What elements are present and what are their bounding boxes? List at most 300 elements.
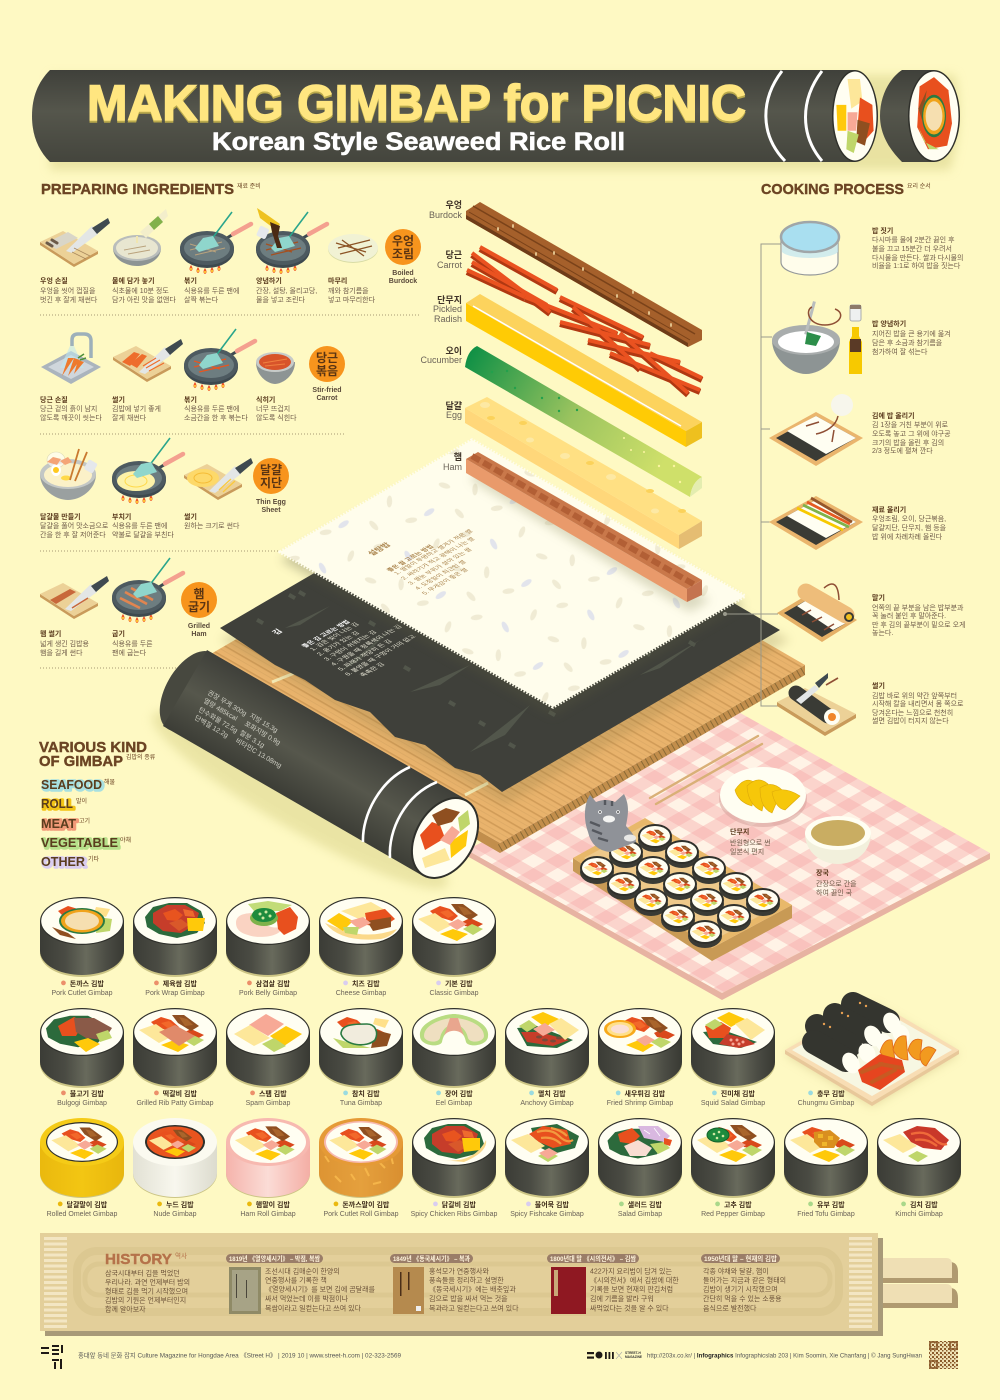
red pepper gimbap: Red Pepper Gimbap [701,1211,765,1218]
salad gimbap: ● 샐러드 김밥 [618,1198,662,1210]
history heading and intro: 함께 알아보자 [105,1304,146,1314]
chungmu gimbap plate: Chungmu Gimbap [798,1100,855,1107]
legend: gimbap categories: 야채 [120,836,131,844]
timeline: late 1950s: 들어가는 지금과 같은 형태의 [703,1276,786,1284]
gimbap row 1 [40,897,496,997]
step text: 달걀을 풀어 맛소금으로 [40,521,109,530]
bento box of gimbap [573,818,792,961]
bulgogi gimbap [40,1008,124,1107]
classic gimbap: ● 기본 김밥 [435,977,473,989]
step text: 않도록 식힌다 [256,413,297,422]
nutrition text: 열량 485kcal [202,697,239,723]
rice text: 좋은 쌀 고르는 방법 [385,543,436,573]
legend: gimbap categories: ROLL [41,796,73,811]
step 5: rolling [777,584,965,642]
step 1: rice pot: 불을 끄고 15분간 더 우려서 [872,244,952,253]
step 3: rice on seaweed: 김에 밥 올리기 [872,411,915,420]
timeline: late 1950s [701,1254,786,1312]
fried shrimp gimbap [598,1008,682,1107]
bowl label [816,868,857,897]
title text: MAKING GIMBAP for PICNIC [87,75,746,131]
icon: soaking bowl with vinegar [113,209,168,266]
step 5: rolling: 놓는다. [872,628,893,637]
strip labels: 오이 [445,346,462,356]
plate label [730,827,771,856]
tuna gimbap [319,1008,403,1107]
nutrition text: 권장 무게 300g [206,688,249,718]
history heading and intro: HISTORY [105,1251,172,1268]
plate of pickled radish [719,767,807,856]
step text: 식초물에 10분 정도 [112,286,169,295]
rolled omelet gimbap: Rolled Omelet Gimbap [47,1211,118,1218]
step text: 간을 한 후 잘 저어준다 [40,530,106,539]
step 2: seasoning rice: 첨가하여 잘 섞는다 [872,347,928,356]
plate label: 반원형으로 썬 [730,838,771,847]
gimbap row 2 [40,1000,959,1107]
step text: 우엉 손질 [40,276,68,285]
strip labels: Burdock [429,210,462,220]
step text: 식용유를 두른 팬에 [184,286,239,295]
heading: cooking process: COOKING PROCESS [761,181,904,198]
spicy fishcake gimbap: ● 불어묵 김밥 [525,1198,569,1210]
step text: 벗긴 후 잘게 채썬다 [40,295,98,304]
bowl label: 하여 끓인 국 [816,888,853,897]
strip labels: 당근 [445,249,462,260]
ingredient strips [420,199,710,612]
timeline: late 1950s: 각종 야채와 달걀, 햄이 [703,1266,769,1276]
history heading and intro: 형태로 김을 먹기 시작했으며 [105,1286,188,1296]
anchovy gimbap: Anchovy Gimbap [520,1100,574,1107]
timeline: 1849: 김으로 밥을 싸서 먹는 것을 [429,1294,508,1303]
history heading and intro: 김밥의 기원은 언제부터인지 [105,1296,186,1304]
step text: 간장, 설탕, 올리고당, [256,286,317,295]
circle: stir-fried carrot [309,346,345,402]
grilled rib patty gimbap: ● 떡갈비 김밥 [153,1087,197,1099]
step text: 물을 넣고 조린다 [256,295,306,304]
step 5: rolling: 말기 [872,593,885,602]
classic gimbap: Classic Gimbap [429,990,479,997]
legend: gimbap categories: MEAT [42,817,78,832]
icon: pan stir-frying burdock [180,212,251,274]
seaweed sheet: 6. 붙였을 때 구멍이 거의 없고 [342,633,418,677]
chungmu gimbap plate: ● 충무 김밥 [807,1087,845,1099]
panel: cooking process steps [769,222,965,736]
big gimbap roll [138,641,493,911]
step 5: rolling: 언쪽의 끝 부분을 남은 밥부분과 [872,603,964,612]
step 5: rolling: 꼭 눌러 붙인 후 말아준다. [872,611,946,620]
strip labels [420,199,463,472]
timeline: late 1800s: 기록을 보면 현재의 판김처럼 [590,1284,673,1294]
footer right: credits and QR code: http://203x.co.kr/ | Infographics Infographicslab 203 | Kim Soomin, Xie Chanfang | © Jang SungHwan [647,1352,922,1360]
pork wrap gimbap: Pork Wrap Gimbap [145,990,205,997]
legend: gimbap categories: OTHER [42,855,87,870]
step 3: rice on seaweed: 크기의 밥을 올린 후 김의 [872,438,944,447]
icon: cooled carrots bowl [256,352,295,384]
circle: boiled burdock: Boiled [392,270,414,277]
spicy chicken ribs gimbap: ● 닭갈비 김밥 [432,1198,476,1210]
timeline: late 1950s: 음식으로 발전했다 [703,1304,757,1312]
seaweed text: 김 [269,627,284,636]
strip labels: 우엉 [445,199,462,210]
legend: gimbap categories: 해물 [104,778,116,786]
step text: 부치기 [112,512,131,521]
nutrition text: 단백질 12.2g [193,713,230,740]
circle: grilled ham [181,582,217,638]
step text: 물에 담가 놓기 [112,276,155,285]
eel gimbap: ● 장어 김밥 [435,1087,473,1099]
step text: 넣고 마무리한다 [328,295,376,304]
step 2: seasoning rice: 지어진 밥을 큰 용기에 옮겨 [872,329,951,338]
pork cutlet gimbap: Pork Cutlet Gimbap [51,990,113,997]
spam gimbap: ● 스팸 김밥 [249,1087,287,1099]
picnic cloth [467,710,990,1000]
footer right: credits and QR code: MAGAZINE [625,1355,642,1359]
strip labels: Pickled [433,304,462,314]
salad gimbap [598,1118,682,1218]
timeline: 1819: 싸서 먹었는데 이를 박점이나 [265,1294,349,1303]
step text: 소금간을 한 후 볶는다 [184,413,248,422]
nude gimbap: ● 누드 김밥 [156,1198,194,1210]
cheese gimbap: ● 치즈 김밥 [342,977,380,989]
step text: 우엉을 씻어 껍질을 [40,286,96,295]
step text: 식용유를 두른 팬에 [112,521,167,530]
timeline: 1819: 조선시대 김매순이 한양의 [265,1266,340,1276]
seaweed sheet: 5. 파래가 적당히 든 김 [335,638,394,672]
circle: grilled ham: 햄 [193,586,205,601]
strip: cucumber [465,346,702,497]
legend: gimbap categories: MEAT [41,816,76,831]
timeline: late 1950s: 1950년대 말 – 현재의 김밥 [704,1254,777,1263]
nutrition text: 탄수화물 72.5g [197,705,240,735]
step text: 김밥에 넣기 좋게 [112,404,161,413]
step 6: slicing roll [777,673,964,736]
history heading and intro [105,1251,190,1314]
squid salad gimbap: Squid Salad Gimbap [701,1100,765,1107]
timeline: 1849: 《동국세시기》에는 배춧잎과 [429,1284,516,1294]
circle: boiled burdock: 우엉 [392,234,414,248]
strip labels: 햄 [454,451,462,462]
step 4: adding fillings: 우엉조림, 오이, 당근볶음, [872,514,946,523]
step text: 약불로 달걀을 부친다 [112,530,174,539]
legend: gimbap categories: 고기 [79,817,90,825]
pork cutlet roll gimbap: Pork Cutlet Roll Gimbap [323,1211,399,1218]
pork cutlet gimbap [40,897,124,997]
circle: boiled burdock [385,229,421,285]
bowl of soup [805,816,871,897]
legend: gimbap categories: VEGETABLE [41,835,118,850]
step text: 않도록 깨끗이 씻는다 [40,413,102,422]
icon: grilling ham [112,558,183,623]
circle: boiled burdock: 조림 [392,247,414,261]
step 6: slicing roll: 썰기 [872,681,885,690]
legend: gimbap categories: SEAFOOD [41,777,102,792]
timeline: late 1950s: 김밥이 생기기 시작했으며 [703,1284,778,1294]
timeline: late 1800s: 422가지 요리법이 담겨 있는 [590,1266,672,1276]
step 3: rice on seaweed: 김 1장을 거친 부분이 위로 [872,420,949,429]
timeline: 1849 [390,1254,519,1314]
tuna gimbap: ● 참치 김밥 [342,1087,380,1099]
timeline: late 1800s: 1800년대 말 《시의전서》 – 김쌈 [550,1254,636,1263]
strip: ham [466,452,710,612]
fried shrimp gimbap: Fried Shrimp Gimbap [607,1100,673,1107]
grilled rib patty gimbap: Grilled Rib Patty Gimbap [136,1100,214,1107]
step text: 햄 썰기 [40,629,61,638]
step 4: adding fillings [769,496,947,550]
anchovy gimbap [505,1008,589,1107]
ham roll gimbap [226,1118,310,1218]
step 4: adding fillings: 밥 위에 차례차례 올린다 [872,532,943,541]
footer right: credits and QR code: STREET-H [625,1351,641,1355]
rice text: 3. 쌀눈 부위가 살아 있는 쌀 [406,547,474,586]
strip: carrot sticks [467,247,702,395]
step text: 원하는 크기로 썬다 [184,521,240,530]
step 2: seasoning rice: 밥 양념하기 [872,319,906,328]
panel: history chopstick sleeve [40,1233,958,1336]
icon: burdock on board [40,218,110,267]
squid salad gimbap [691,1008,775,1107]
classic gimbap [412,897,496,997]
rice text: 1. 쌀알이 투명하고 쌀겨가 적은 쌀 [392,528,475,576]
step text: 굽기 [112,629,125,638]
rice text: 설탕밥 [365,541,393,557]
step 3: rice on seaweed: 2/3 정도에 펼쳐 깐다 [872,446,933,455]
pork wrap gimbap: ● 제육쌈 김밥 [153,977,197,989]
spicy fishcake gimbap: Spicy Fishcake Gimbap [510,1211,584,1218]
rice text [365,528,477,596]
circle: stir-fried carrot: Stir-fried [312,387,342,394]
nutrition text: 지방 15.3g [248,711,280,735]
icon: chopsticks [878,1258,958,1308]
heading: various kind of gimbap: 김밥의 종류 [126,753,156,761]
legend: gimbap categories: VEGETABLE [42,836,120,851]
seaweed sheet: 1. 검은 빛이 나는 김 [307,621,361,652]
kimchi gimbap [877,1118,961,1218]
footer left: logo and credit: 홍대앞 동네 문화 잡지 Culture Magazine for Hongdae Area 《Street H》 | 2019 10 | www.street-h.com | 02-323-2569 [78,1350,401,1360]
heading: various kind of gimbap [39,739,156,770]
spam gimbap [226,1008,310,1107]
footer left: logo and credit [41,1345,401,1369]
seaweed sheet: 좋은 김 고르는 방법 [299,618,352,649]
heading: various kind of gimbap: VARIOUS KIND [39,739,147,756]
timeline: 1819 [226,1254,376,1314]
pork belly gimbap: Pork Belly Gimbap [239,990,297,997]
panel: stir-fried carrot steps [40,329,345,422]
kimchi gimbap: ● 김치 김밥 [900,1198,938,1210]
seaweed sheet: 2. 윤기가 있는 김 [314,630,362,657]
strip labels: Ham [443,462,462,472]
nutrition text [193,688,284,770]
step 1: rice pot: 비율을 1:1로 하여 밥을 짓는다 [872,261,961,270]
step 6: slicing roll: 김밥 바로 위의 약간 앞쪽부터 [872,691,957,700]
bowl label: 장국 [816,868,829,877]
tuna gimbap: Tuna Gimbap [340,1100,382,1107]
bamboo mat [192,487,805,853]
step text: 살짝 볶는다 [184,295,219,304]
pork cutlet roll gimbap [319,1118,403,1218]
legend: gimbap categories: OTHER [41,854,86,869]
legend: gimbap categories [41,777,131,870]
icon: slicing ham [40,576,109,619]
heading: various kind of gimbap: OF GIMBAP [39,753,123,770]
plate label: 일본식 편지 [730,847,764,856]
chungmu gimbap plate [785,1000,959,1107]
fried tofu gimbap [784,1118,868,1218]
timeline: late 1800s: 김에 기름을 발라 구워 [590,1294,654,1303]
step text: 넓게 생긴 김밥용 [40,639,90,648]
step text: 썰기 [112,395,125,404]
rice text: 4. 도정일이 최근인 쌀 [413,559,468,591]
pork belly gimbap [226,897,310,997]
step 1: rice pot: 밥 짓기 [872,226,893,235]
step text [40,276,376,304]
cheese gimbap: Cheese Gimbap [336,990,386,997]
nutrition text: 비타민C 13.08mg [234,736,284,770]
timeline: late 1800s: 《시의전서》에서 김쌈에 대한 [590,1276,679,1284]
step 2: seasoning rice [772,301,951,374]
red pepper gimbap [691,1118,775,1218]
step text: 당근 겉의 흙이 남지 [40,404,97,413]
eel gimbap: Eel Gimbap [436,1100,472,1107]
strip: egg [465,397,702,549]
circle: stir-fried carrot: 볶음 [316,364,338,378]
circle: thin egg sheet: 달걀 [260,462,282,477]
step 6: slicing roll: 당겨온다는 느낌으로 천천히 [872,708,953,717]
grilled rib patty gimbap [133,1008,217,1107]
step text: 식히기 [256,395,275,404]
legend: gimbap categories: ROLL [42,797,75,812]
seaweed sheet: 4. 구웠을 때 청록색이 나는 김 [328,623,404,667]
panel: boiled burdock steps [40,208,421,304]
panel: grilled ham steps [40,558,217,657]
step 6: slicing roll: 썰면 김밥이 터지지 않는다 [872,716,949,725]
circle: boiled burdock: Burdock [389,278,417,285]
icon: slicing carrots [113,339,183,382]
heading: preparing ingredients: 재료 준비 [237,182,261,190]
ham roll gimbap: Ham Roll Gimbap [240,1211,296,1218]
step text: 당근 손질 [40,395,68,404]
plate label: 단무지 [730,827,749,836]
history heading and intro: 우리나라. 과연 언제부터 밥의 [105,1278,190,1286]
chopsticks on cloth [650,736,762,804]
timeline: 1819: 복쌈이라고 일컫는다고 쓰여 있다 [265,1304,362,1312]
spicy fishcake gimbap [505,1118,589,1218]
circle: grilled ham: Ham [191,631,207,638]
strip: pickled radish [466,294,702,447]
step 1: rice pot: 다시마를 물에 2분간 끓인 후 [872,235,955,244]
step text: 깨와 참기름을 [328,286,369,295]
seaweed sheet [220,466,790,805]
timeline: 1819: 연중행사를 기록한 책 [265,1276,327,1284]
step 4: adding fillings: 달걀지단, 단무지, 햄 등을 [872,523,947,532]
icon: frying egg [112,438,183,504]
timeline: 1819: 1819년 《열양세시기》 – 박점, 복쌈 [229,1254,320,1263]
timeline: late 1800s: 싸먹었다는 것을 알 수 있다 [590,1304,669,1312]
icon: tabby cat [585,794,636,852]
heading: preparing ingredients: PREPARING INGREDIENTS [41,181,234,198]
heading: cooking process: 요리 순서 [907,182,931,190]
circle: thin egg sheet: Sheet [261,507,281,514]
timeline: 1849: 1849년 《동국세시기》 – 복과 [393,1254,470,1263]
step text: 너무 뜨겁지 [256,404,290,413]
step text: 식용유를 두른 팬에 [184,404,239,413]
pork wrap gimbap [133,897,217,997]
legend: gimbap categories: SEAFOOD [42,778,104,793]
spicy chicken ribs gimbap [411,1118,497,1218]
strip: burdock [466,202,702,347]
icon: pan stir-frying carrots [184,329,255,391]
title text: Korean Style Seaweed Rice Roll [212,128,625,156]
eel gimbap [412,1008,496,1107]
nude gimbap [133,1118,217,1218]
anchovy gimbap: ● 멸치 김밥 [528,1087,566,1099]
circle: thin egg sheet [253,458,289,514]
pork cutlet roll gimbap: ● 돈까스말이 김밥 [333,1198,390,1210]
timeline: late 1950s: 간단히 먹을 수 있는 소풍용 [703,1294,782,1303]
kimchi gimbap: Kimchi Gimbap [895,1211,943,1218]
strip labels: Radish [434,314,462,324]
icon: washing carrots in sink [41,334,101,384]
history heading and intro: 삼국시대부터 김을 먹었던 [105,1268,180,1278]
step text [40,512,240,539]
rice sheet [280,440,745,716]
step 3: rice on seaweed: 오도록 놓고 그 위에 야구공 [872,429,951,438]
legend: gimbap categories: 기타 [88,855,100,863]
title text: MAKING GIMBAP for PICNIC [87,77,746,133]
strip labels: 달걀 [445,400,463,411]
legend: gimbap categories: 말이 [76,797,87,805]
circle: thin egg sheet: Thin Egg [256,499,286,506]
step text: 양념하기 [256,276,282,285]
step text: 달걀물 만들기 [40,512,81,521]
step text: 담가 아린 맛을 없앤다 [112,295,176,304]
strip labels: Cucumber [420,355,462,365]
step text: 팬에 굽는다 [112,648,147,657]
icon: seasoning in pan [256,208,327,274]
step 2: seasoning rice: 담은 후 소금과 참기름을 [872,338,943,347]
salad gimbap: Salad Gimbap [618,1211,662,1218]
step 6: slicing roll: 시작해 칼을 내리면서 몸 쪽으로 [872,699,964,708]
ham roll gimbap: ● 햄말이 김밥 [246,1198,290,1210]
step 1: rice pot: 다시물을 만든다. 쌀과 다시물의 [872,253,964,262]
fried tofu gimbap: Fried Tofu Gimbap [797,1211,855,1218]
fried shrimp gimbap: ● 새우튀김 김밥 [615,1087,666,1099]
title text [87,75,746,156]
strip labels: Egg [446,410,462,420]
pork cutlet gimbap: ● 돈까스 김밥 [60,977,104,989]
step text: 썰기 [184,512,197,521]
rice text: 5. 무게감이 좋은 쌀 [420,567,470,596]
process connector lines [724,244,785,706]
nude gimbap: Nude Gimbap [153,1211,197,1218]
bowl label: 간장으로 간을 [816,879,857,888]
panel: thin egg sheet steps [40,438,289,539]
pork belly gimbap: ● 삼겹살 김밥 [246,977,290,989]
spam gimbap: Spam Gimbap [246,1100,290,1107]
circle: stir-fried carrot: Carrot [316,395,338,402]
step text [40,395,297,422]
timeline: 1849: 풍속들을 정리하고 설명한 [429,1276,504,1284]
timeline: 1849: 홍석모가 연중행사와 [429,1266,489,1276]
step 5: rolling: 만 후 김의 끝부분이 밑으로 오게 [872,620,965,629]
step text: 볶기 [184,276,197,285]
step 4: adding fillings: 재료 올리기 [872,505,906,514]
step text: 식용유를 두른 [112,639,153,648]
footer right: credits and QR code [587,1341,958,1369]
strip labels: 단무지 [437,295,462,305]
squid salad gimbap: ● 진미채 김밥 [711,1087,755,1099]
seaweed sheet: 3. 구멍이 쉬워지는 김 [321,629,379,662]
step 1: rice pot [781,222,964,275]
